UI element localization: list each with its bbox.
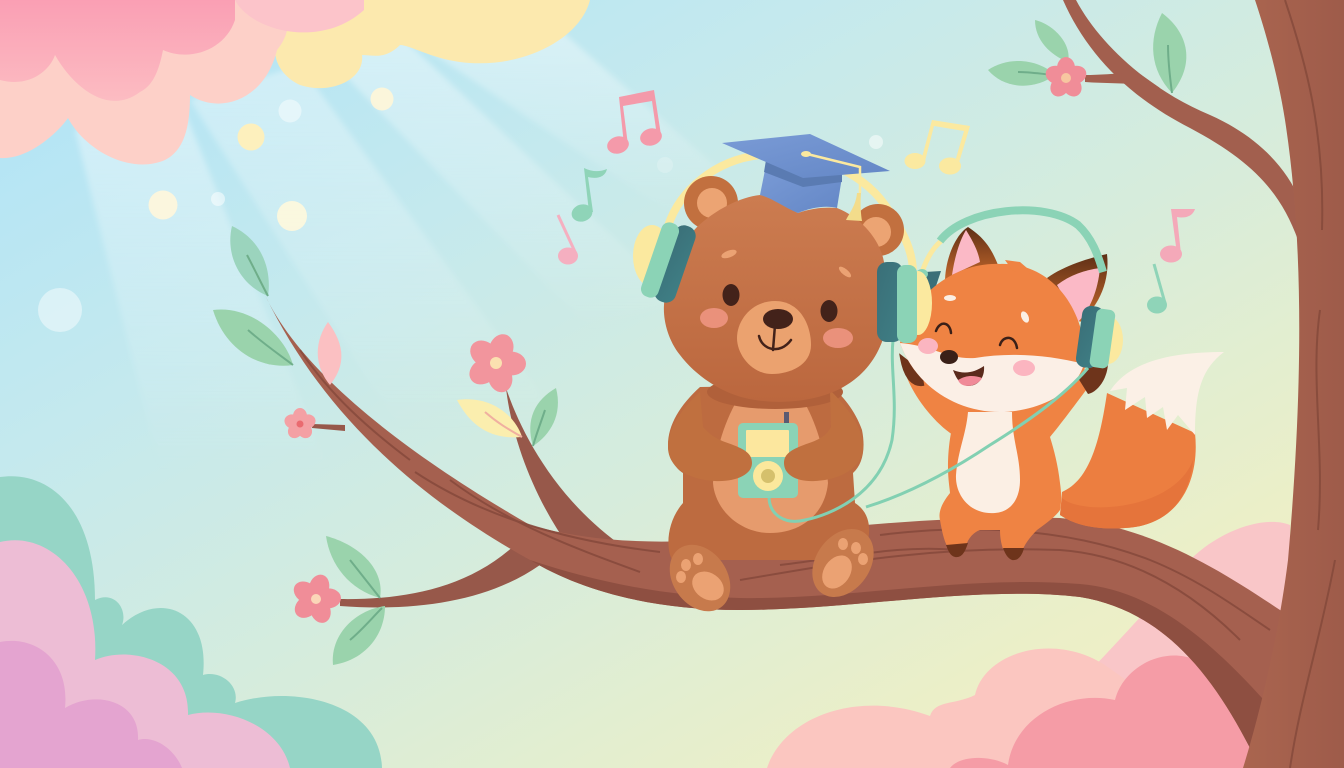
yellow cloud top xyxy=(275,0,590,88)
bear right foot xyxy=(800,517,886,609)
bear body xyxy=(657,340,1088,623)
fox fur tuft xyxy=(1005,260,1032,280)
yellow double note xyxy=(904,120,970,174)
mint note xyxy=(570,168,607,224)
fox tail xyxy=(1060,352,1224,528)
upper flower twig xyxy=(506,388,625,548)
bear cheeks xyxy=(700,308,853,348)
fox muzzle xyxy=(900,343,1084,412)
bear belly xyxy=(713,395,828,533)
lower left twig xyxy=(340,540,540,607)
player wires xyxy=(769,340,1088,521)
bear ears xyxy=(684,176,904,256)
upper right branch xyxy=(1063,0,1300,240)
fox cheeks xyxy=(918,338,1035,376)
bear nose and smile xyxy=(759,309,793,350)
bear right toes xyxy=(838,538,868,565)
floating bubbles xyxy=(38,88,883,332)
fox nose xyxy=(940,350,958,364)
fox feet xyxy=(946,543,968,557)
light rays xyxy=(75,30,720,470)
bark lines xyxy=(300,350,1270,640)
bear right arm xyxy=(784,390,863,481)
bear left foot xyxy=(657,533,743,623)
fox forehead marks xyxy=(944,295,1031,324)
pink double note xyxy=(605,90,664,156)
fox xyxy=(900,210,1123,560)
fox body xyxy=(939,405,1061,549)
bear left headphone cup xyxy=(633,220,698,305)
bear music player xyxy=(738,412,798,498)
pink note right xyxy=(1160,209,1195,262)
fox right arm xyxy=(1012,362,1092,437)
main branch xyxy=(265,295,1320,768)
fox right cup xyxy=(1075,305,1123,369)
fox back headphone band xyxy=(922,238,945,272)
tree trunk xyxy=(1243,0,1344,768)
flowers xyxy=(283,57,1089,626)
fox headphone band xyxy=(940,210,1103,272)
flower top right xyxy=(1043,57,1089,100)
fox eyes xyxy=(936,324,1017,348)
fox right ear xyxy=(1047,254,1108,322)
cap tassel xyxy=(846,193,862,221)
small flower left xyxy=(283,408,317,441)
bushes bottom right xyxy=(767,522,1290,768)
fox belly xyxy=(956,412,1020,513)
fox head xyxy=(900,264,1086,412)
fox left arm xyxy=(903,362,965,435)
music notes xyxy=(558,90,1195,314)
trunk bark lines xyxy=(1285,0,1335,768)
bear left arm xyxy=(668,392,752,481)
tree branches xyxy=(265,0,1320,768)
leaves xyxy=(213,13,1186,665)
pink blossom top left xyxy=(0,0,364,164)
bear left toes xyxy=(676,553,703,583)
bushes bottom left xyxy=(0,476,382,768)
mint note right xyxy=(1147,264,1167,314)
bear right headphone cup xyxy=(877,262,932,343)
bear brow highlights xyxy=(720,248,853,279)
fox mouth xyxy=(953,366,984,386)
small twig left xyxy=(312,424,345,431)
bear eyes xyxy=(722,284,838,322)
fox left ear xyxy=(945,227,998,282)
bear neck shadow xyxy=(707,375,843,409)
bear headphone band xyxy=(668,154,913,270)
flower lower twig xyxy=(290,572,341,626)
graduation cap xyxy=(722,134,890,221)
bear torso xyxy=(668,385,869,560)
bear head xyxy=(664,176,904,402)
fox hidden left cup xyxy=(916,269,941,292)
small pink note xyxy=(558,215,578,264)
flower upper twig xyxy=(464,331,526,395)
bear muzzle xyxy=(737,301,811,374)
bear head shape xyxy=(664,195,888,402)
